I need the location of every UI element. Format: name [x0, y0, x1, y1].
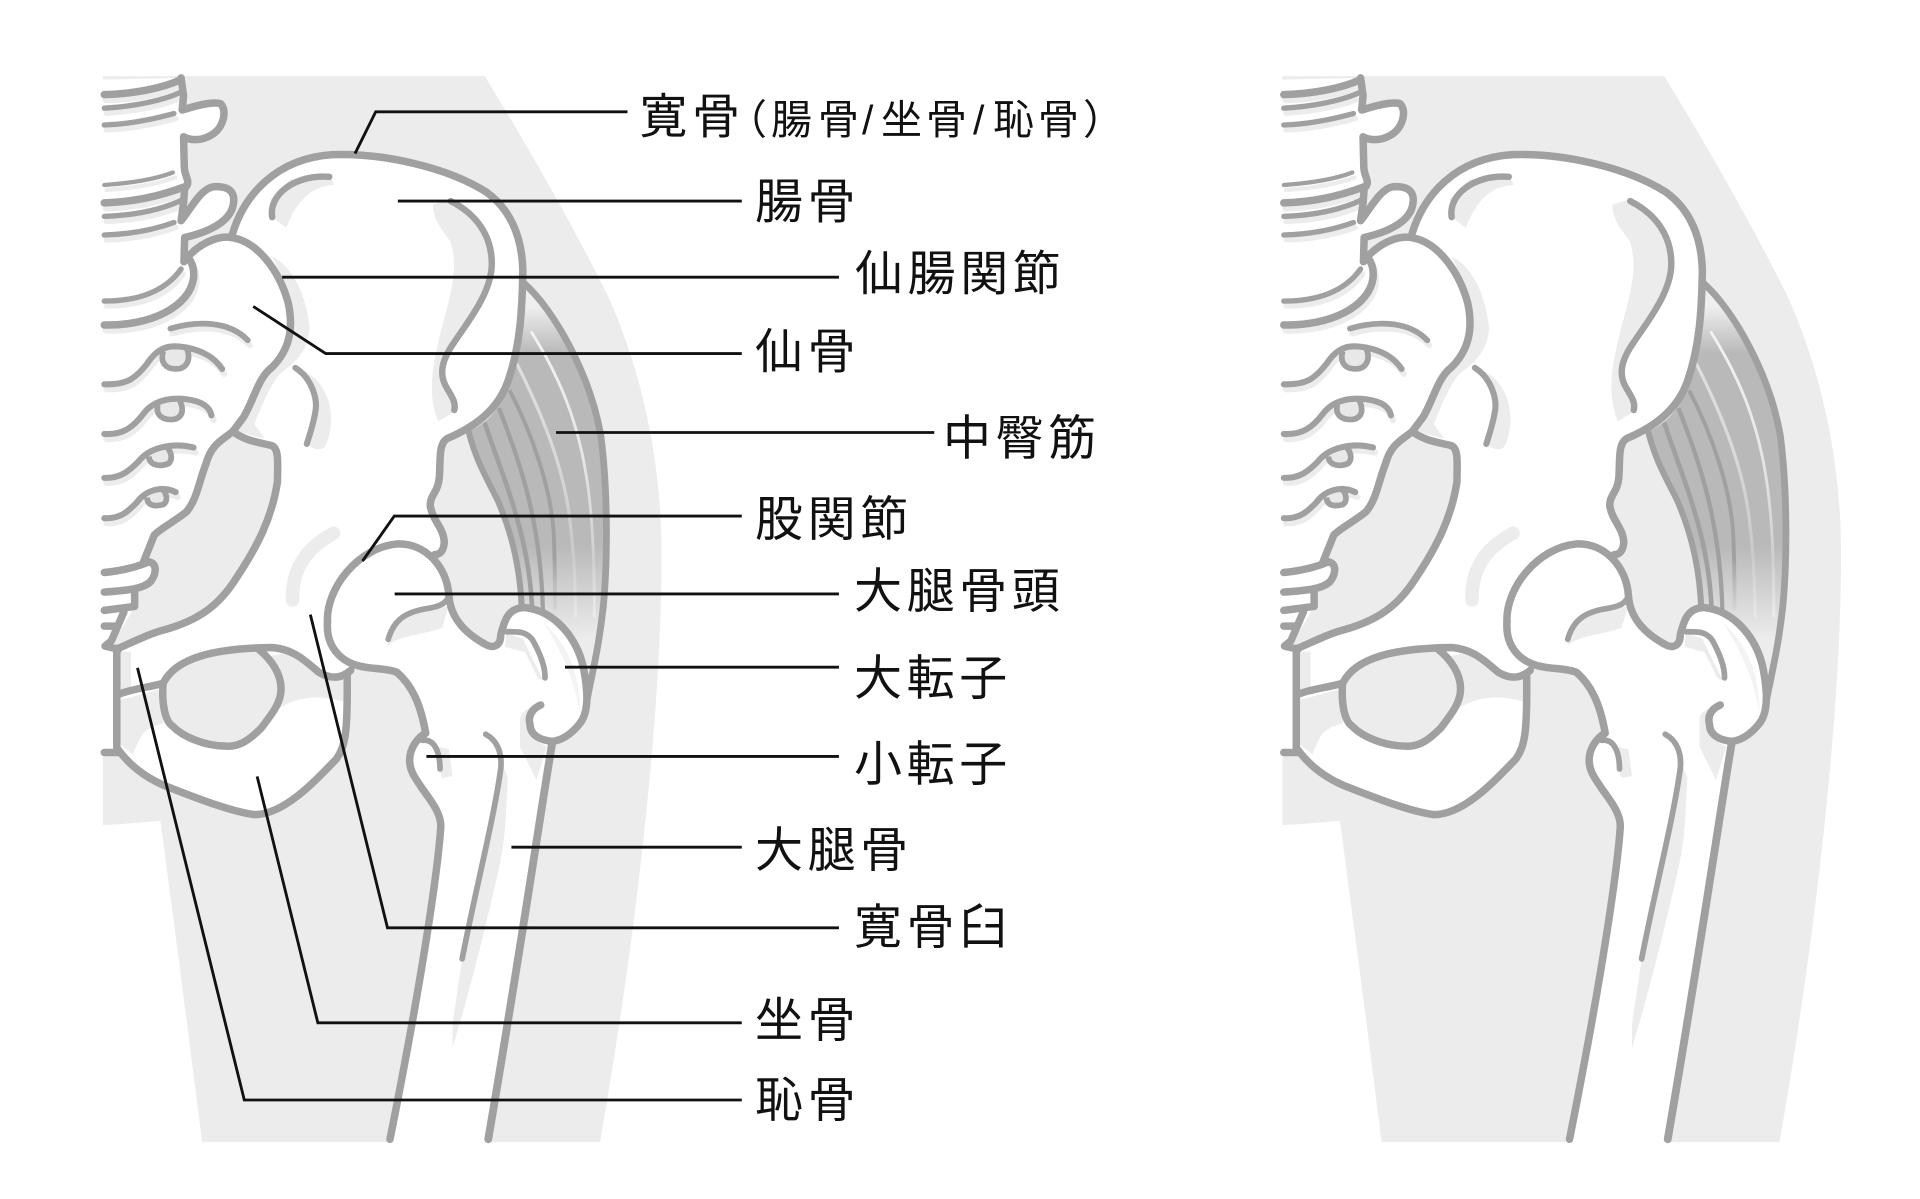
labels: [640, 91, 1124, 1128]
body silhouette: [103, 76, 662, 1142]
label: pubis: 恥骨: [755, 1074, 860, 1128]
sacrum outline: [144, 237, 290, 562]
shadow of acetabular rim: [292, 533, 334, 600]
bone outlines: [104, 78, 587, 1139]
ilium inner lines: [272, 177, 329, 217]
ilium outline: [232, 154, 523, 555]
label: femur: 大腿骨: [755, 824, 913, 878]
sacrum lower tip: [104, 562, 155, 649]
obturator foramen: [165, 650, 281, 746]
gluteus medius muscle: [469, 283, 606, 699]
label: sacroiliac joint: 仙腸関節: [855, 248, 1065, 301]
label: lesser trochanter: 小転子: [854, 738, 1012, 792]
label: hip bone: （腸骨/坐骨/恥骨）: [726, 97, 1124, 143]
pelvis and pubis outline: [117, 648, 347, 815]
femur interior shadows: [388, 606, 580, 1048]
label: hip bone: 寛骨: [640, 91, 745, 144]
right figure: unlabelled hip anatomy: [1282, 76, 1841, 1142]
bone shadows: [120, 176, 492, 755]
label: sacrum: 仙骨: [755, 326, 860, 379]
white bone fills: [103, 78, 523, 815]
leader lines: [138, 112, 934, 1100]
lumbar spine outline: [181, 78, 234, 262]
label: acetabulum: 寛骨臼: [854, 902, 1012, 954]
label: ilium: 腸骨: [755, 176, 860, 229]
label: ischium: 坐骨: [755, 994, 860, 1048]
vertebra line shadows: [106, 85, 250, 523]
femur fill: [327, 544, 587, 1142]
label: femoral head: 大腿骨頭: [854, 566, 1064, 618]
label: greater trochanter: 大転子: [854, 652, 1012, 706]
label: gluteus medius: 中臀筋: [943, 412, 1101, 466]
vertebra and sacrum lines: [104, 80, 248, 518]
sciatic notch: [119, 431, 278, 648]
label: hip joint: 股関節: [755, 494, 913, 546]
left figure: hip anatomy: [103, 76, 662, 1142]
foramen outline: [163, 649, 281, 746]
femur outline: [327, 544, 587, 741]
sacral foramina: [147, 348, 189, 506]
